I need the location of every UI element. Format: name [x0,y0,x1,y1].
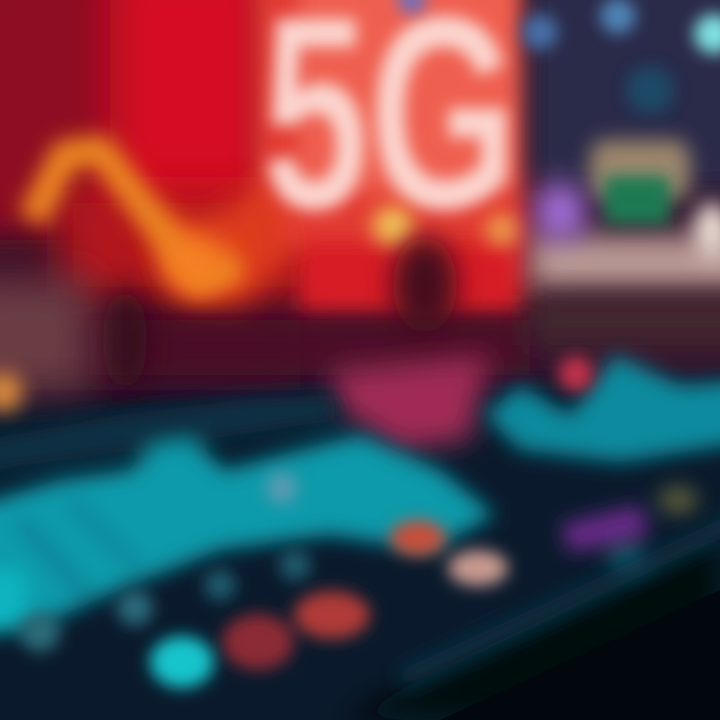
right cluster: beige device with green screen [530,140,720,345]
pink and magenta centre tiles [330,355,490,450]
small muted dots across the teal chart [20,472,311,652]
background: upper dark wash and lower navy [294,0,720,720]
glowing orange line chart with glow fill [32,150,290,305]
orange-red screen panel behind the headline [254,0,522,310]
bright yellow highlights under the lettering [373,206,518,246]
rosy brown block on the left edge [0,280,90,390]
bright cyan button [150,636,214,688]
dark silhouette in front of the screen [103,237,457,390]
purple and olive chips on the right [560,486,698,574]
bokeh lights in the top right [398,0,720,114]
teal chart in the lower left [0,395,495,640]
desk edge strip [400,510,720,680]
red wall panel on the left [0,0,530,390]
teal chart on the right [485,355,720,462]
red and cream buttons [222,520,508,670]
orange spot on the left edge [0,372,23,412]
